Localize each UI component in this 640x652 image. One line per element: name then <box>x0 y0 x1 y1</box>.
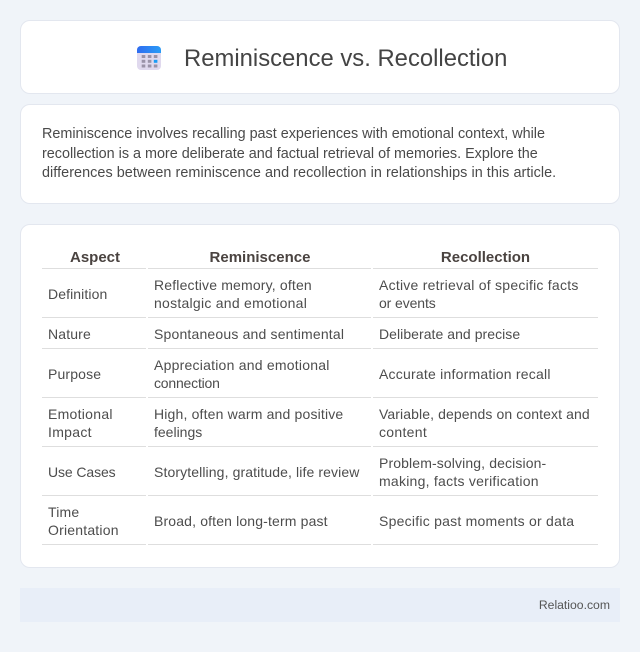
row: Emotional Impact: content <box>379 424 427 440</box>
footer bar <box>20 588 620 622</box>
row: Emotional Impact <box>48 406 590 440</box>
row: Purpose <box>48 357 551 391</box>
row: Definition: nostalgic and emotional <box>154 295 307 311</box>
row: Purpose: Purpose <box>48 366 101 382</box>
row: Time Orientation: Orientation <box>48 522 119 538</box>
row: Use Cases <box>48 455 546 489</box>
row: Purpose: Appreciation and emotional <box>154 357 330 373</box>
table header: Aspect <box>70 249 120 266</box>
row: Definition: Active retrieval of specific facts <box>379 277 579 293</box>
table header: Reminiscence <box>210 249 310 266</box>
table header <box>70 249 530 266</box>
row: Use Cases: Storytelling, gratitude, life review <box>154 464 360 480</box>
row: Use Cases: Use Cases <box>48 464 116 480</box>
icon: calendar <box>137 46 161 70</box>
panel: introduction <box>20 104 620 204</box>
row: Nature: Deliberate and precise <box>379 326 520 342</box>
row: Time Orientation: Time <box>48 504 79 520</box>
row: Purpose: connection <box>154 375 220 391</box>
footer credit: Relatioo.com <box>539 598 610 612</box>
row: Nature <box>48 326 520 342</box>
row: Emotional Impact: feelings <box>154 424 202 440</box>
panel: title card <box>20 20 620 94</box>
row: Definition: or events <box>379 295 436 311</box>
row: Emotional Impact: Emotional <box>48 406 113 422</box>
row: Purpose: Accurate information recall <box>379 366 551 382</box>
text block: introduction: recollection is a more deliberate and factual retrieval of memories. Explore the <box>42 146 538 162</box>
text block: introduction <box>42 126 556 181</box>
title: Reminiscence vs. Recollection <box>184 45 507 72</box>
row: Definition: Reflective memory, often <box>154 277 312 293</box>
row: Use Cases: making, facts verification <box>379 473 539 489</box>
row: Emotional Impact: High, often warm and positive <box>154 406 343 422</box>
row: Emotional Impact: Variable, depends on context and <box>379 406 590 422</box>
row: Nature: Spontaneous and sentimental <box>154 326 344 342</box>
row: Time Orientation: Broad, often long-term past <box>154 513 328 529</box>
row: Emotional Impact: Impact <box>48 424 92 440</box>
row: Nature: Nature <box>48 326 91 342</box>
row: Time Orientation <box>48 504 574 538</box>
row: Definition: Definition <box>48 286 107 302</box>
panel: comparison table <box>20 224 620 568</box>
table header: Recollection <box>441 249 530 266</box>
row: Definition <box>48 277 579 311</box>
text block: introduction: differences between reminiscence and recollection in relationships in this article. <box>42 165 556 181</box>
row: Use Cases: Problem-solving, decision- <box>379 455 546 471</box>
row: Time Orientation: Specific past moments or data <box>379 513 574 529</box>
text block: introduction: Reminiscence involves recalling past experiences with emotional context, while <box>42 126 545 142</box>
